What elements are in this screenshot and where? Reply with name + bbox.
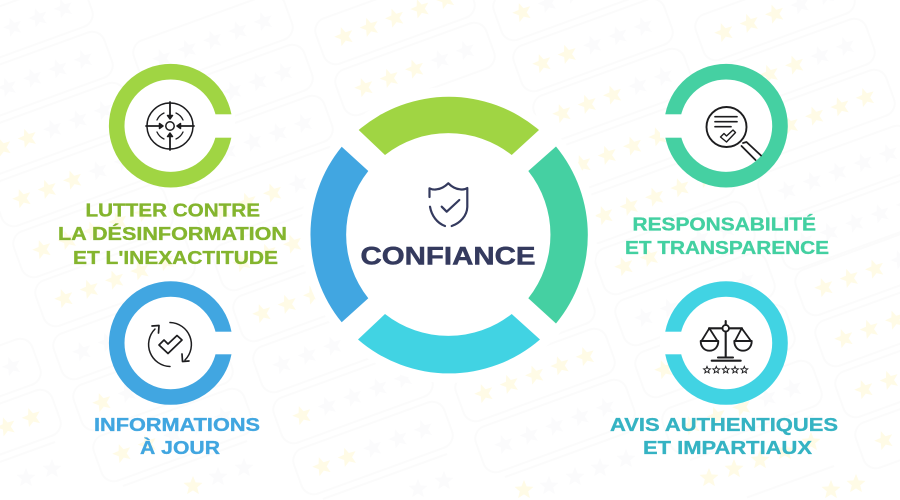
label: lutter contre la désinformation et l'inexactitude: LUTTER CONTRE <box>86 200 260 221</box>
icon: magnifier over document with check <box>706 107 761 160</box>
ring segment: bottom cyan <box>358 314 540 373</box>
label: lutter contre la désinformation et l'inexactitude <box>58 200 287 268</box>
panel: informations à jour <box>94 281 260 458</box>
label: lutter contre la désinformation et l'inexactitude: LA DÉSINFORMATION <box>58 223 287 244</box>
ring: green <box>109 64 235 188</box>
ring: cyan <box>660 281 788 405</box>
panel: lutter contre la désinformation <box>58 64 287 268</box>
label: responsabilité et transparence <box>625 214 829 258</box>
panel: central trust ring <box>301 87 597 383</box>
label: informations à jour: À JOUR <box>140 437 220 458</box>
icon: circular arrows with check <box>149 322 191 366</box>
ring: blue <box>109 281 235 405</box>
heading: CONFIANCE: CONFIANCE <box>360 242 536 270</box>
ring segment: right teal <box>528 146 588 324</box>
label: avis authentiques et impartiaux: ET IMPARTIAUX <box>643 437 813 458</box>
label: avis authentiques et impartiaux <box>610 414 838 458</box>
icon: target with arrows <box>146 102 194 150</box>
ring segment: top green <box>359 97 539 155</box>
label: avis authentiques et impartiaux: AVIS AUTHENTIQUES <box>610 414 838 435</box>
label: responsabilité et transparence: RESPONSABILITÉ <box>632 214 816 235</box>
label: responsabilité et transparence: ET TRANSPARENCE <box>625 237 829 258</box>
icon: shield with check <box>430 183 467 226</box>
label: informations à jour: INFORMATIONS <box>94 414 260 435</box>
ring: teal <box>660 64 788 188</box>
panel: avis authentiques et impartiaux <box>610 281 838 458</box>
panel: responsabilité et transparence <box>625 64 829 258</box>
label: informations à jour <box>94 414 260 458</box>
ring segment: left blue <box>310 147 368 322</box>
label: lutter contre la désinformation et l'inexactitude: ET L'INEXACTITUDE <box>73 247 278 268</box>
icon: balance scale with five stars <box>701 321 752 373</box>
